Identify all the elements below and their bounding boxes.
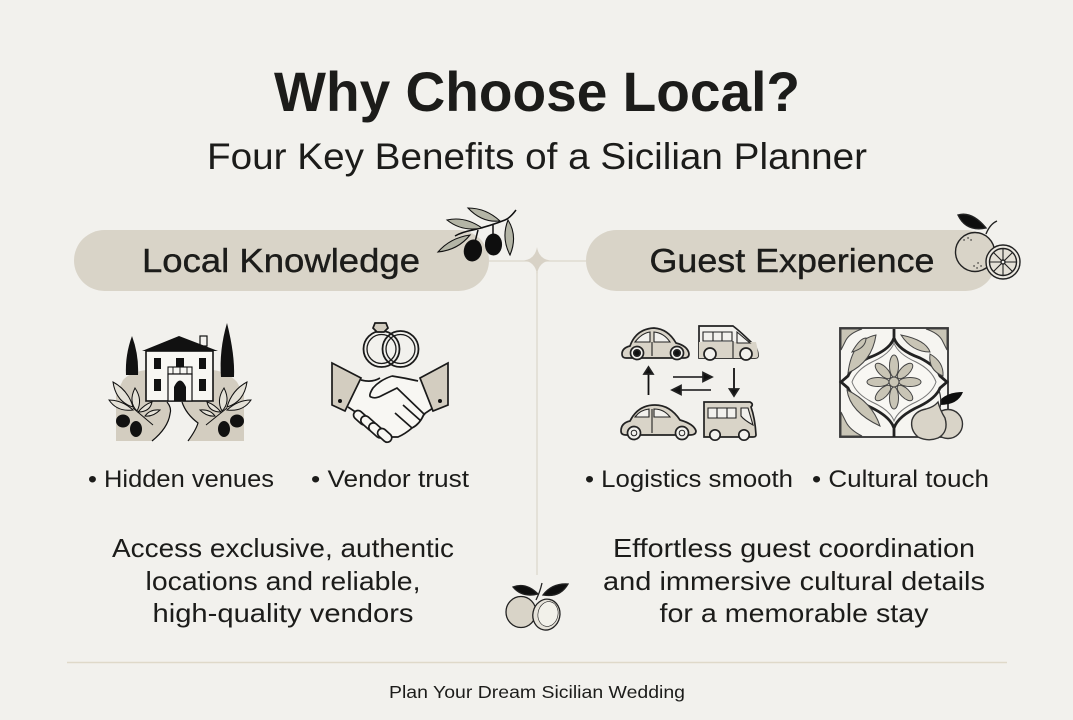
bullet: Vendor trust: • Vendor trust <box>311 466 469 493</box>
icon: olive branch <box>438 208 516 263</box>
icon: rings and handshake <box>332 323 448 444</box>
icon: villa with olive branches <box>109 323 251 441</box>
description: guest experience: for a memorable stay <box>660 598 928 628</box>
bullet: Hidden venues: • Hidden venues <box>88 466 274 493</box>
icon: majolica tile with lemons <box>840 328 963 440</box>
icon: car bottom <box>621 405 696 440</box>
icon: bus bottom <box>704 402 756 440</box>
center divider with star <box>488 247 586 575</box>
icon: orange with slice <box>956 214 1020 279</box>
bullet: Logistics smooth: • Logistics smooth <box>585 466 793 493</box>
title: Why Choose Local? <box>274 60 800 123</box>
description: guest experience <box>603 533 985 628</box>
icon: vehicles and arrows <box>621 326 758 440</box>
description: local knowledge: high-quality vendors <box>152 598 414 628</box>
footer rule <box>67 662 1007 664</box>
description: local knowledge <box>112 533 454 628</box>
heading pill: Guest Experience <box>586 230 996 291</box>
heading pill: Guest Experience: Guest Experience <box>650 242 934 279</box>
footer text: Plan Your Dream Sicilian Wedding <box>389 682 685 702</box>
description: guest experience: and immersive cultural details <box>603 566 985 596</box>
icon: arrows <box>644 367 738 396</box>
icon: van top <box>699 326 758 360</box>
description: guest experience: Effortless guest coordination <box>613 533 975 563</box>
icon: small car top <box>622 328 689 360</box>
subtitle: Four Key Benefits of a Sicilian Planner <box>207 136 867 177</box>
heading pill: Local Knowledge <box>74 230 489 291</box>
description: local knowledge: Access exclusive, authentic <box>112 533 454 563</box>
heading pill: Local Knowledge: Local Knowledge <box>142 242 420 279</box>
icon: lemons <box>506 583 568 633</box>
description: local knowledge: locations and reliable, <box>146 566 420 596</box>
bullet: Cultural touch: • Cultural touch <box>812 466 989 493</box>
